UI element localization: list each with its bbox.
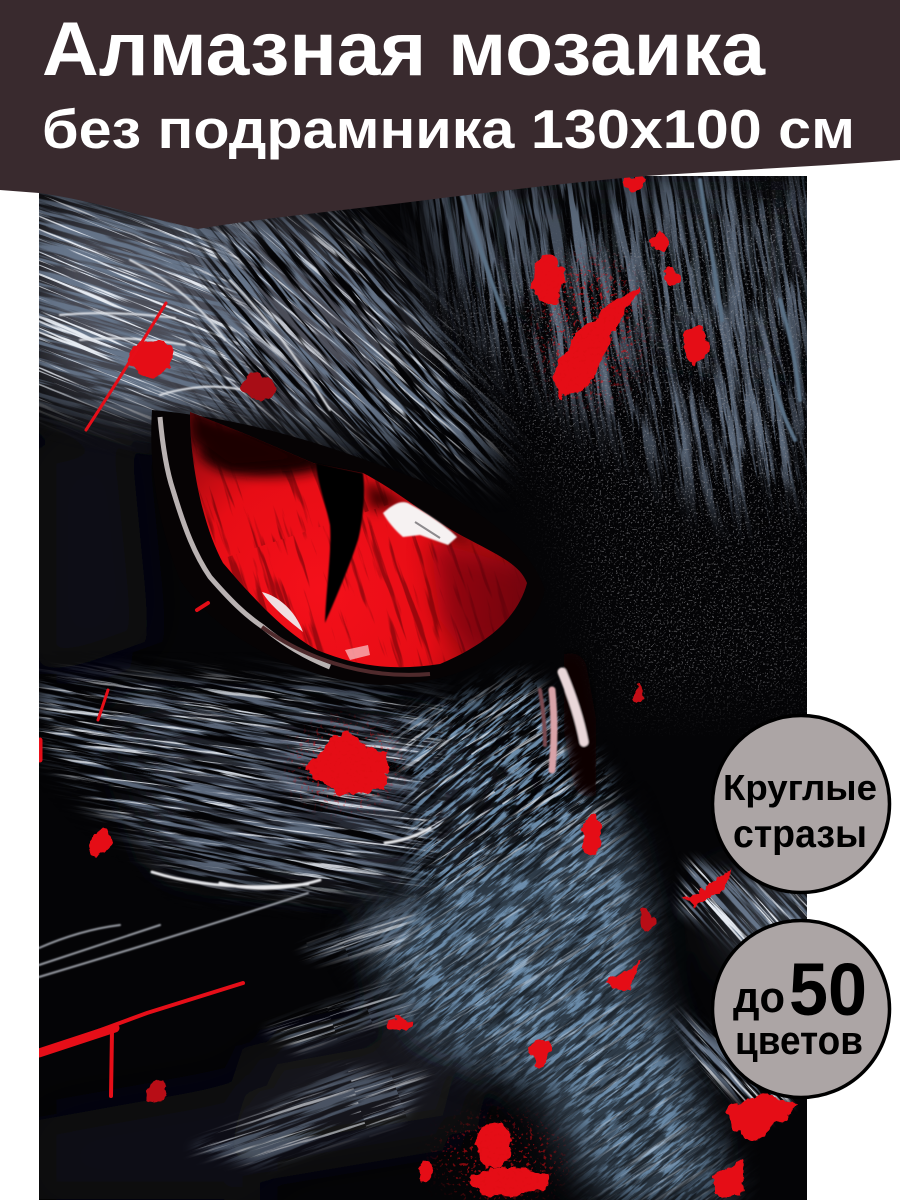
right muzzle fur xyxy=(660,850,807,1130)
upper-left fur streaks xyxy=(39,193,273,440)
badge: up to 50 colours: 50 xyxy=(789,948,867,1031)
title: Алмазная мозаика xyxy=(42,7,766,92)
red splatters xyxy=(88,176,798,1196)
badge: up to 50 colours xyxy=(712,920,890,1098)
eye rim xyxy=(160,417,330,667)
subtitle: без подрамника 130х100 см xyxy=(42,98,855,160)
badge: round rhinestones: Круглые xyxy=(723,767,877,808)
blue-grey fur streaks xyxy=(342,794,750,1200)
lower scattered fur xyxy=(190,896,434,1172)
fur tone masses xyxy=(39,190,807,1199)
red streak and drip xyxy=(39,303,243,1096)
header banner with title xyxy=(0,0,900,229)
red speckle xyxy=(281,246,656,1200)
slit pupil xyxy=(316,463,364,623)
painting: black cat with red eye xyxy=(39,176,807,1200)
badge: up to 50 colours: до xyxy=(733,973,785,1022)
badge: round rhinestones: стразы xyxy=(733,813,867,856)
hand strokes xyxy=(39,180,800,977)
badge: round rhinestones xyxy=(712,716,890,892)
upper-right vertical fur streaks xyxy=(401,176,807,534)
lower-left fur streaks xyxy=(39,661,457,908)
iris xyxy=(190,412,527,668)
eye socket xyxy=(151,410,442,685)
brow highlight below the eye corner xyxy=(540,670,590,780)
eye xyxy=(151,400,545,685)
header background xyxy=(0,0,900,229)
badge: up to 50 colours: цветов xyxy=(735,1019,863,1063)
eye highlight xyxy=(383,502,457,545)
